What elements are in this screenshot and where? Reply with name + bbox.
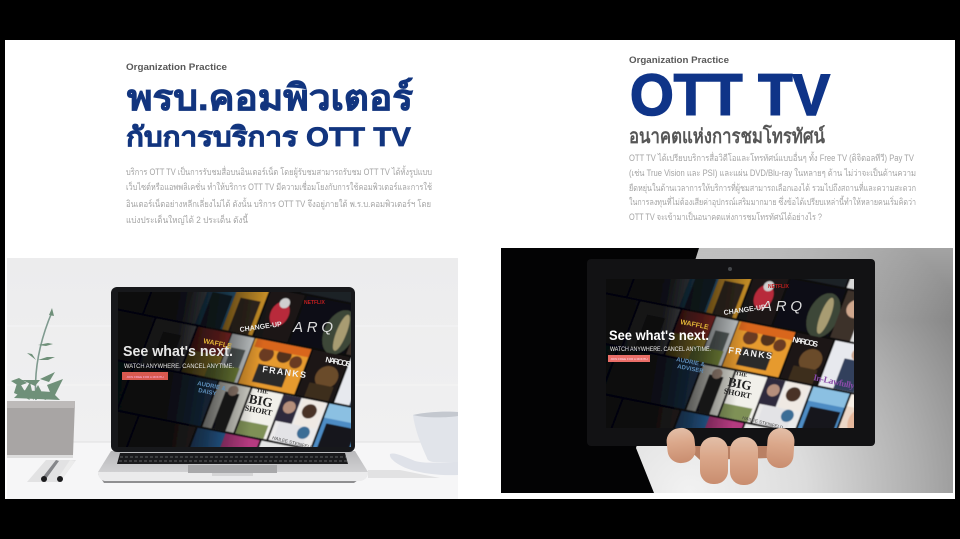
screen: Netflix landing page: HAILEE STEINFELD xyxy=(742,415,784,430)
icon: coffee cup and saucer xyxy=(368,412,458,478)
screen headline: JOIN FREE FOR A MONTH xyxy=(610,357,648,361)
screen: Netflix landing page: SHORT xyxy=(244,403,274,418)
screen: Netflix landing page xyxy=(606,279,854,428)
screen headline xyxy=(608,327,711,362)
panel: left slide xyxy=(7,62,463,514)
left paragraph: อินเตอร์เน็ตอย่างหลีกเลี่ยงไม่ได้ ดังนั้น บริการ OTT TV จึงอยู่ภายใต้ พ.ร.บ.คอมพิวเตอร์ฯ โดย xyxy=(126,197,431,210)
screen: Netflix landing page: WAFFLE xyxy=(203,338,233,351)
icon: concrete pot xyxy=(7,401,75,458)
left paragraph xyxy=(126,165,432,225)
screen: Netflix landing page: In-Lawfully xyxy=(813,372,856,391)
screen: Netflix landing page: THE xyxy=(256,388,269,396)
screen: Netflix landing page: NETFLIX xyxy=(768,284,789,290)
left title: กับการบริการ OTT TV xyxy=(126,122,411,152)
screen: Netflix landing page: CHANGE-UP xyxy=(723,304,767,317)
left paragraph: บริการ OTT TV เป็นการรับชมสื่อบนอินเตอร์เน็ต โดยผู้รับชมสามารถรับชม OTT TV ได้ทั้งรูปแบบ xyxy=(126,165,432,178)
photo: laptop on desk xyxy=(7,258,458,499)
left title xyxy=(126,77,414,152)
screen: Netflix landing page: ADVISER xyxy=(677,364,705,375)
left kicker: Organization Practice xyxy=(126,62,227,73)
screen: Netflix landing page: AUDRIE & xyxy=(676,357,706,369)
tablet xyxy=(587,259,875,446)
right paragraph: (เช่น True Vision และ PSI) และแผ่น DVD/Blu-ray ในหลายๆ ด้าน ไม่ว่าจะเป็นด้านความ xyxy=(629,166,916,178)
icon: succulent plant xyxy=(11,308,63,400)
right paragraph: OTT TV จะเข้ามาเป็นอนาคตแห่งการชมโทรทัศน์ได้อย่างไร ? xyxy=(629,210,822,222)
screen: Netflix landing page: AUDRIE & xyxy=(197,381,227,393)
screen: Netflix landing page: NETFLIX xyxy=(304,300,325,306)
screen: Netflix landing page: NARCOS xyxy=(792,335,820,349)
icon: fingers xyxy=(665,427,795,485)
screen: Netflix landing page: ARQ xyxy=(292,319,333,336)
right title: OTT TV xyxy=(630,63,830,128)
left title: พรบ.คอมพิวเตอร์ xyxy=(127,77,414,118)
screen: Netflix landing page: FRANKS xyxy=(262,364,307,380)
icon: pens xyxy=(27,460,76,482)
right paragraph: OTT TV ได้เปรียบบริการสื่อวิดีโอและโทรทัศน์แบบอื่นๆ ทั้ง Free TV (ดิจิตอลทีวี) Pay TV xyxy=(629,151,914,163)
screen: Netflix landing page: BIG xyxy=(727,374,753,393)
screen: Netflix landing page xyxy=(118,292,351,447)
screen: Netflix landing page: HAILEE STEINFELD xyxy=(272,435,314,450)
screen: Netflix landing page: NARCOS xyxy=(325,355,353,369)
screen: Netflix landing page: BIG xyxy=(248,391,274,410)
screen: Netflix landing page: DAISY xyxy=(198,388,217,397)
left paragraph: แบ่งประเด็นใหญ่ได้ 2 ประเด็น ดังนี้ xyxy=(126,213,249,225)
left paragraph: เว็บไซต์หรือแอพพลิเคชั่น ทำให้บริการ OTT TV มีความเชื่อมโยงกับการใช้คอมพิวเตอร์และการใช้ xyxy=(126,180,432,192)
screen: Netflix landing page: THE xyxy=(735,371,748,379)
screen headline: See what's next. xyxy=(609,327,709,343)
right subtitle: อนาคตแห่งการชมโทรทัศน์ xyxy=(629,124,825,148)
screen headline xyxy=(122,344,234,380)
screen: Netflix landing page: CHANGE-UP xyxy=(239,321,283,334)
screen: Netflix landing page: SHORT xyxy=(723,386,753,401)
panel: right slide xyxy=(491,55,953,497)
right paragraph xyxy=(629,151,916,222)
screen: Netflix landing page: FRANKS xyxy=(728,345,773,361)
screen headline: WATCH ANYWHERE. CANCEL ANYTIME. xyxy=(610,347,711,353)
right kicker: Organization Practice xyxy=(629,55,729,66)
screen headline: See what's next. xyxy=(123,344,233,360)
screen: Netflix landing page: WAFFLE xyxy=(680,319,710,332)
photo: hand holding tablet xyxy=(501,248,953,493)
laptop xyxy=(98,287,368,483)
screen headline: JOIN FREE FOR A MONTH xyxy=(126,375,164,379)
screen: Netflix landing page: ARQ xyxy=(761,298,802,315)
screen headline: WATCH ANYWHERE. CANCEL ANYTIME. xyxy=(124,363,234,370)
